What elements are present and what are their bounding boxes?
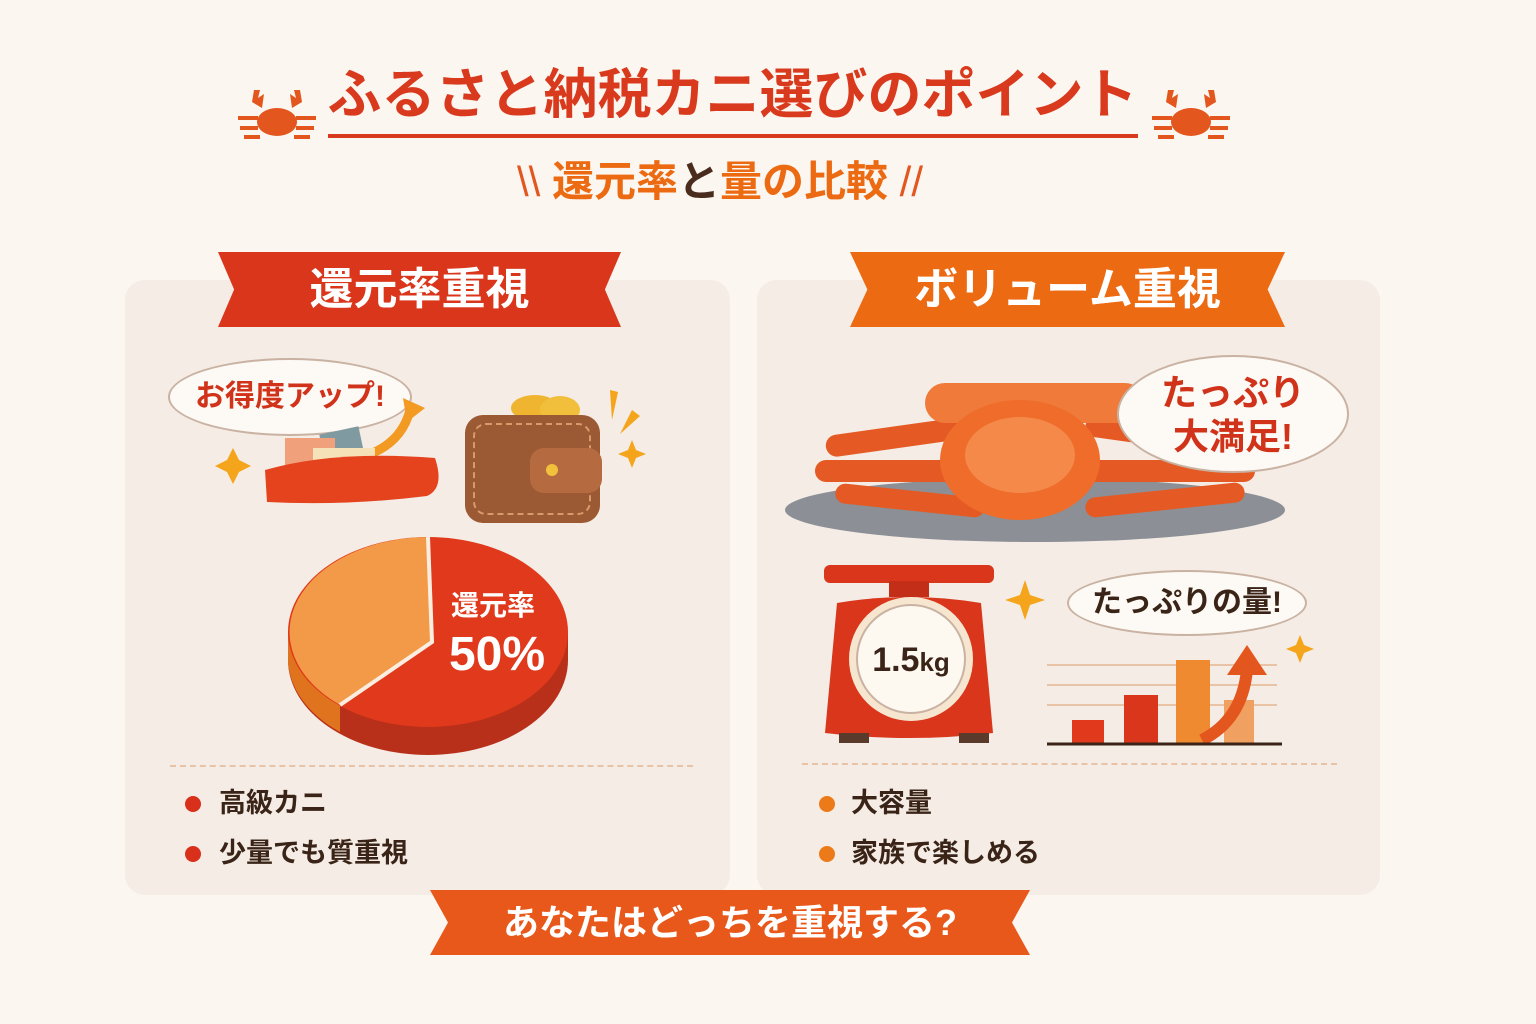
illustration: crab on plate [785, 383, 1285, 542]
divider [802, 763, 1337, 765]
pie chart: 還元率50% [288, 537, 568, 755]
icon: scale 1.5kg [824, 565, 994, 743]
bottom banner [430, 890, 1030, 955]
divider [170, 765, 693, 767]
pie chart: 還元率50%: 還元率 [451, 590, 535, 621]
bullet list left [185, 788, 408, 868]
bullet list left: 高級カニ [219, 788, 327, 818]
speech bubble: たっぷり大満足: 大満足! [1173, 416, 1293, 457]
panel: right ボリューム重視 [757, 280, 1380, 895]
sparkles [1005, 580, 1314, 663]
ribbon: ボリューム重視: ボリューム重視 [914, 265, 1221, 314]
bar chart with arrow [1047, 645, 1282, 746]
speech bubble: お得度アップ: お得度アップ! [195, 380, 385, 413]
bottom banner: あなたはどっちを重視する? [503, 902, 957, 943]
ribbon: 還元率重視: 還元率重視 [310, 265, 530, 314]
speech bubble: たっぷりの量: たっぷりの量! [1092, 586, 1282, 619]
speech bubble: たっぷり大満足: たっぷり [1161, 372, 1305, 413]
icon: money tray with arrow [215, 398, 439, 504]
title underline [328, 134, 1138, 138]
speech bubble: たっぷり大満足 [1117, 355, 1349, 473]
icon: crab left [238, 90, 316, 139]
bullet list left: 少量でも質重視 [219, 838, 408, 868]
ribbon: ボリューム重視 [850, 252, 1285, 327]
icon: wallet with coins [465, 390, 646, 523]
bullet list right [819, 788, 1040, 868]
panel: left 還元率重視 [125, 280, 730, 895]
bullet list right: 家族で楽しめる [851, 838, 1040, 868]
speech bubble: たっぷりの量 [1067, 570, 1307, 636]
pie chart: 還元率50%: 50% [449, 628, 545, 681]
speech bubble: お得度アップ [168, 358, 412, 436]
icon: crab right [1152, 90, 1230, 139]
icon: scale 1.5kg: 1.5kg [872, 641, 950, 679]
title: ふるさと納税カニ選びのポイント [328, 65, 1138, 125]
bullet list right: 大容量 [851, 788, 932, 818]
ribbon: 還元率重視 [218, 252, 621, 327]
subtitle: \\ 還元率と量の比較 // [517, 158, 923, 205]
